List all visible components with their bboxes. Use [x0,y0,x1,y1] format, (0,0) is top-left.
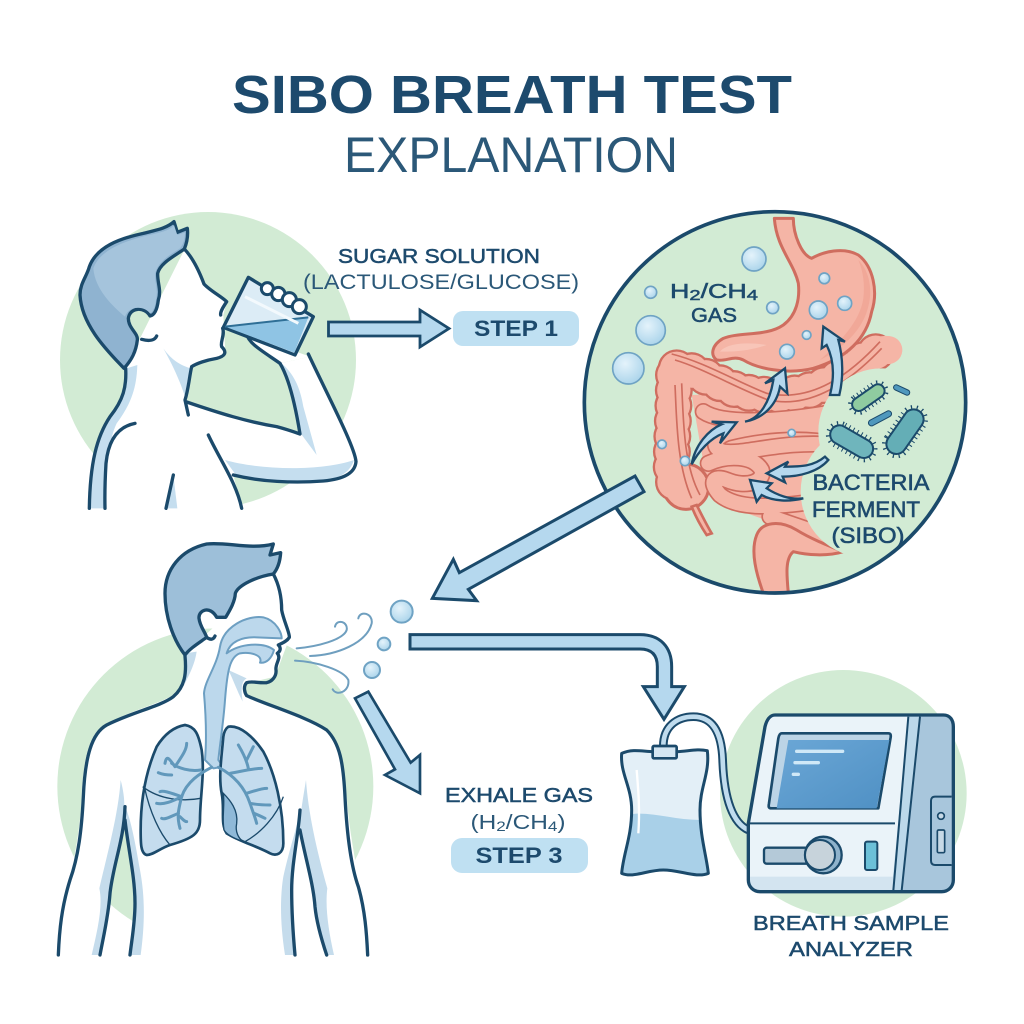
gas bubbles [613,247,852,466]
sample bag [620,744,710,876]
label: sugar solution: (LACTULOSE/GLUCOSE) [303,271,579,294]
breath swirls [295,614,372,693]
body outline [89,249,356,508]
lungs [141,725,283,855]
icon: glass of water [223,277,313,355]
exhaled bubbles [364,601,413,678]
arrow: to bag [410,635,684,719]
label: exhale gas: (H [470,812,492,834]
label: exhale gas: 2 [496,818,506,834]
label: breath sample analyzer: BREATH SAMPLE [753,913,949,935]
arrow: to step 3 [355,692,420,793]
slider and knob [764,848,811,864]
panel: breath sample analyzer [617,670,967,917]
label: sugar solution: SUGAR SOLUTION [338,246,540,268]
label: gas [670,281,758,327]
bacteria area [800,368,886,554]
airway [204,617,282,768]
bacteria [827,382,928,461]
title: SIBO BREATH TEST [232,65,792,125]
label: gas: 2 [689,287,701,304]
analyzer machine [748,715,953,892]
label: exhale gas: ) [557,812,566,834]
body outline [58,574,368,955]
body shadows [91,348,354,508]
screen [769,733,891,808]
step 3 pill: STEP 3 [476,843,562,868]
label: exhale gas [445,785,593,834]
stomach [713,218,875,371]
label: gas: GAS [691,305,737,327]
label: sugar solution [303,246,579,294]
label: gas: 4 [747,287,758,304]
label: breath sample analyzer: ANALYZER [789,939,913,961]
arm shadows [92,652,334,955]
side port [931,797,952,865]
tube [663,717,748,830]
label: exhale gas: 4 [548,818,558,834]
panel: man drinking [60,212,356,508]
step 1 pill [453,311,579,346]
label: gas: H [670,281,684,303]
small intestine base [692,394,825,520]
panel: digestive tract [584,212,967,593]
label: bacteria ferment [812,470,930,548]
arrow: to step 1 [328,310,449,347]
step 3 pill [451,838,588,873]
subtitle: EXPLANATION [344,127,678,183]
hair [80,222,188,368]
label: bacteria ferment: BACTERIA [812,470,930,495]
step 1 pill: STEP 1 [474,316,558,341]
label: breath sample analyzer [753,913,949,961]
arrow: from intestine to exhale [432,476,644,601]
label: exhale gas: EXHALE GAS [445,785,593,807]
small intestine [703,412,837,538]
rectum [754,524,843,593]
bronchi [157,743,270,828]
label: gas: /CH [701,281,747,303]
process arrows [692,327,845,502]
panel: man exhaling [57,544,413,955]
large intestine [663,342,888,509]
hair [165,544,281,655]
label: bacteria ferment: (SIBO) [832,523,904,548]
gap between arm and torso [110,830,134,921]
label: exhale gas: /CH [506,812,548,834]
label: bacteria ferment: FERMENT [812,497,920,522]
